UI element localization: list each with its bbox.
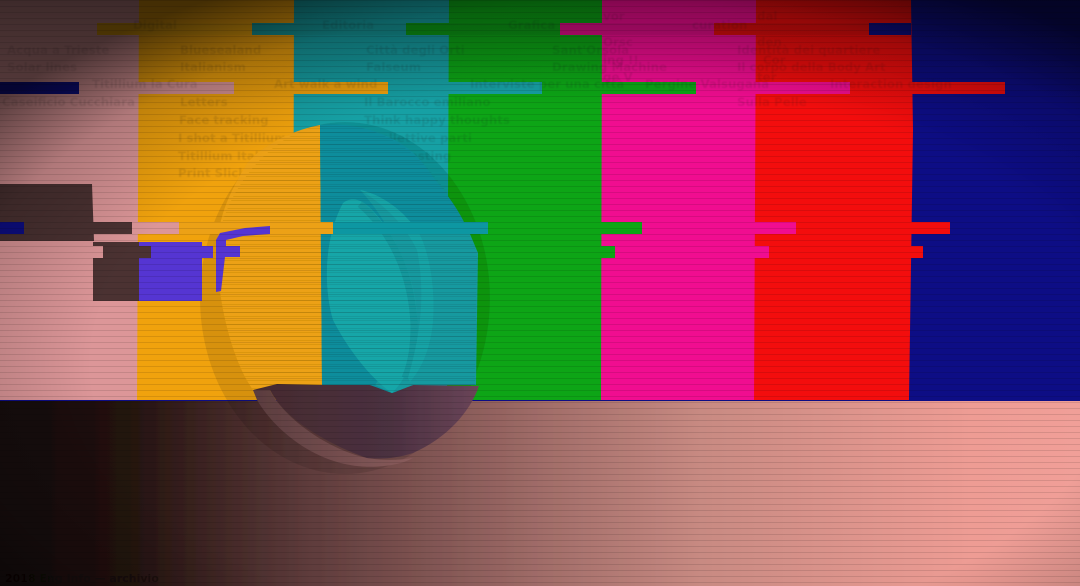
lens lower teal region <box>360 190 478 393</box>
dark strip <box>103 246 151 258</box>
column 4: Pergine Valsugana <box>645 77 769 91</box>
displaced text fragments: den <box>757 35 782 49</box>
strip y 82 <box>0 82 1005 94</box>
column 2: I shot a Titillium <box>178 131 286 145</box>
column 5: Identità dei quartiere <box>737 43 880 57</box>
column 4: Drawing Machine <box>552 60 667 74</box>
column 3: Think happy thoughts <box>364 113 510 127</box>
column 2: Titillium Italia <box>178 149 271 163</box>
column 3 <box>364 43 624 163</box>
displaced text fragments: ter <box>757 70 777 84</box>
strip y 246 <box>490 246 923 258</box>
column 5: Interaction design <box>830 77 952 91</box>
dark block <box>93 242 140 301</box>
credit line: 2018 Eng Info — archivio <box>5 572 159 585</box>
floor gradient band <box>0 401 1080 586</box>
displaced text fragments <box>603 9 786 84</box>
top darkening overlay <box>0 0 1080 110</box>
pink notch <box>93 246 103 258</box>
lens lighter rim band <box>253 390 413 467</box>
lens crescent shadow arc <box>360 204 414 378</box>
column 1: Titillium la Cura <box>92 77 198 91</box>
column headers: Grafica <box>508 18 555 32</box>
purple strip <box>151 246 213 258</box>
column 2: Italianism <box>180 60 246 74</box>
lens shadow <box>200 122 490 474</box>
column 4: Sant'Orsola <box>552 43 629 57</box>
column 2 <box>178 43 377 180</box>
lens teal body <box>320 124 477 393</box>
column 3: Collettive parti <box>372 131 472 145</box>
upper shifted scan strips <box>0 23 1005 94</box>
column 3: Il Barocco emiliano <box>364 95 490 109</box>
displaced text fragments: ge V <box>603 70 634 84</box>
displaced text fragments: Orsc <box>603 35 633 49</box>
faded text listing <box>2 9 952 180</box>
column headers <box>133 18 747 32</box>
displaced text fragments: Cor <box>763 53 786 67</box>
purple block <box>139 242 202 301</box>
column 2: Letters <box>180 95 228 109</box>
lens crescent ring <box>360 190 434 382</box>
blue f glyph shape <box>216 226 270 292</box>
column 1 <box>2 43 198 109</box>
strip y 23 <box>97 23 911 35</box>
column 3: Città degli Orti <box>366 43 465 57</box>
displaced text fragments: ing !! <box>603 53 639 67</box>
lens dark hemisphere <box>253 384 479 458</box>
column 2: Bluesealand <box>180 43 261 57</box>
displaced text fragments: vor <box>603 9 625 23</box>
column headers: Editoria <box>322 18 374 32</box>
column 4 <box>552 43 769 91</box>
column 1: Solar lines <box>7 60 77 74</box>
colour bars <box>0 0 1080 401</box>
column 3: Falseum <box>366 60 421 74</box>
column 5: Sulla Pelle <box>737 95 807 109</box>
column 2: Art walk a wind <box>274 77 377 91</box>
lower shifted scan strips <box>0 222 950 258</box>
column 5: Il corpo della Body Art <box>737 60 886 74</box>
column 3: Interviste per una città <box>470 77 624 91</box>
displaced text fragments: dal <box>757 9 777 23</box>
column 1: Acqua a Trieste <box>7 43 109 57</box>
column headers: Digital <box>133 18 177 32</box>
lens orange body <box>217 125 322 390</box>
column 3: Typecasting <box>372 149 451 163</box>
dark block upper left <box>0 184 94 241</box>
column 2: Face tracking <box>179 113 269 127</box>
lens inner highlight <box>327 199 417 393</box>
column 5 <box>737 43 952 109</box>
column 2: Print Slick <box>178 166 247 180</box>
glitch dark blocks <box>0 184 213 301</box>
column headers: curation <box>692 18 747 32</box>
lens body line texture <box>217 124 477 390</box>
lens illustration <box>200 122 490 474</box>
column 1: Caseificio Cucchiara <box>2 95 135 109</box>
strip y 222 <box>0 222 950 234</box>
